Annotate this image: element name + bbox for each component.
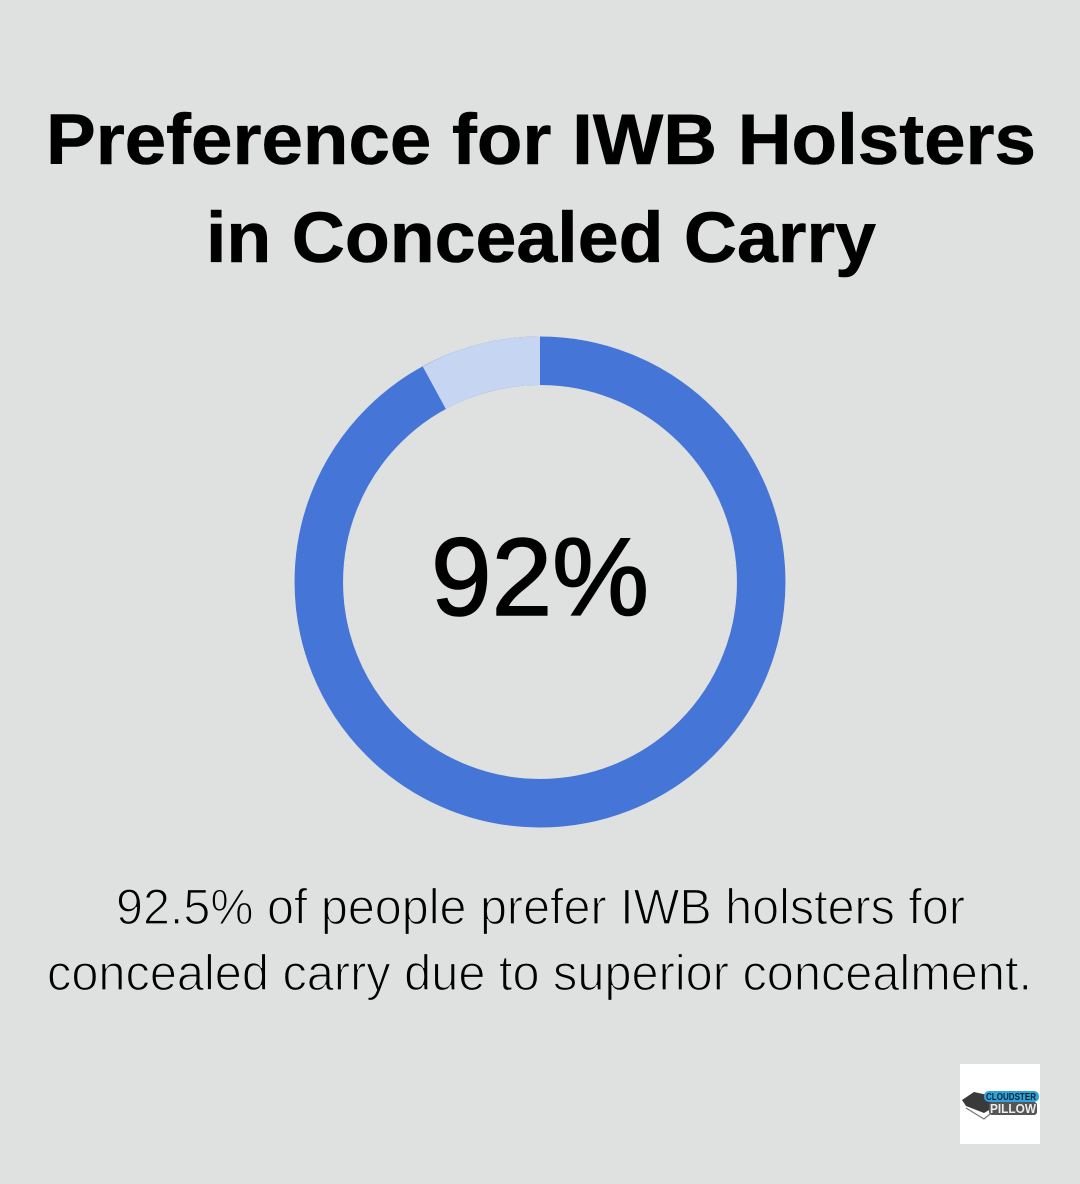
- donut chart: 92%: [319, 361, 761, 803]
- center value: 92%: [431, 516, 649, 639]
- description text: 92.5% of people prefer IWB holsters for: [116, 879, 965, 935]
- title: Preference for IWB Holsters: [46, 101, 1036, 180]
- title: [46, 101, 1036, 278]
- remaining 8% segment: [434, 361, 540, 388]
- description text: [47, 879, 1032, 1001]
- title: in Concealed Carry: [206, 199, 877, 278]
- logo: CLOUDSTER: [986, 1092, 1037, 1103]
- logo: [960, 1064, 1040, 1144]
- logo: PILLOW: [990, 1101, 1037, 1116]
- description text: concealed carry due to superior concealment.: [47, 945, 1032, 1001]
